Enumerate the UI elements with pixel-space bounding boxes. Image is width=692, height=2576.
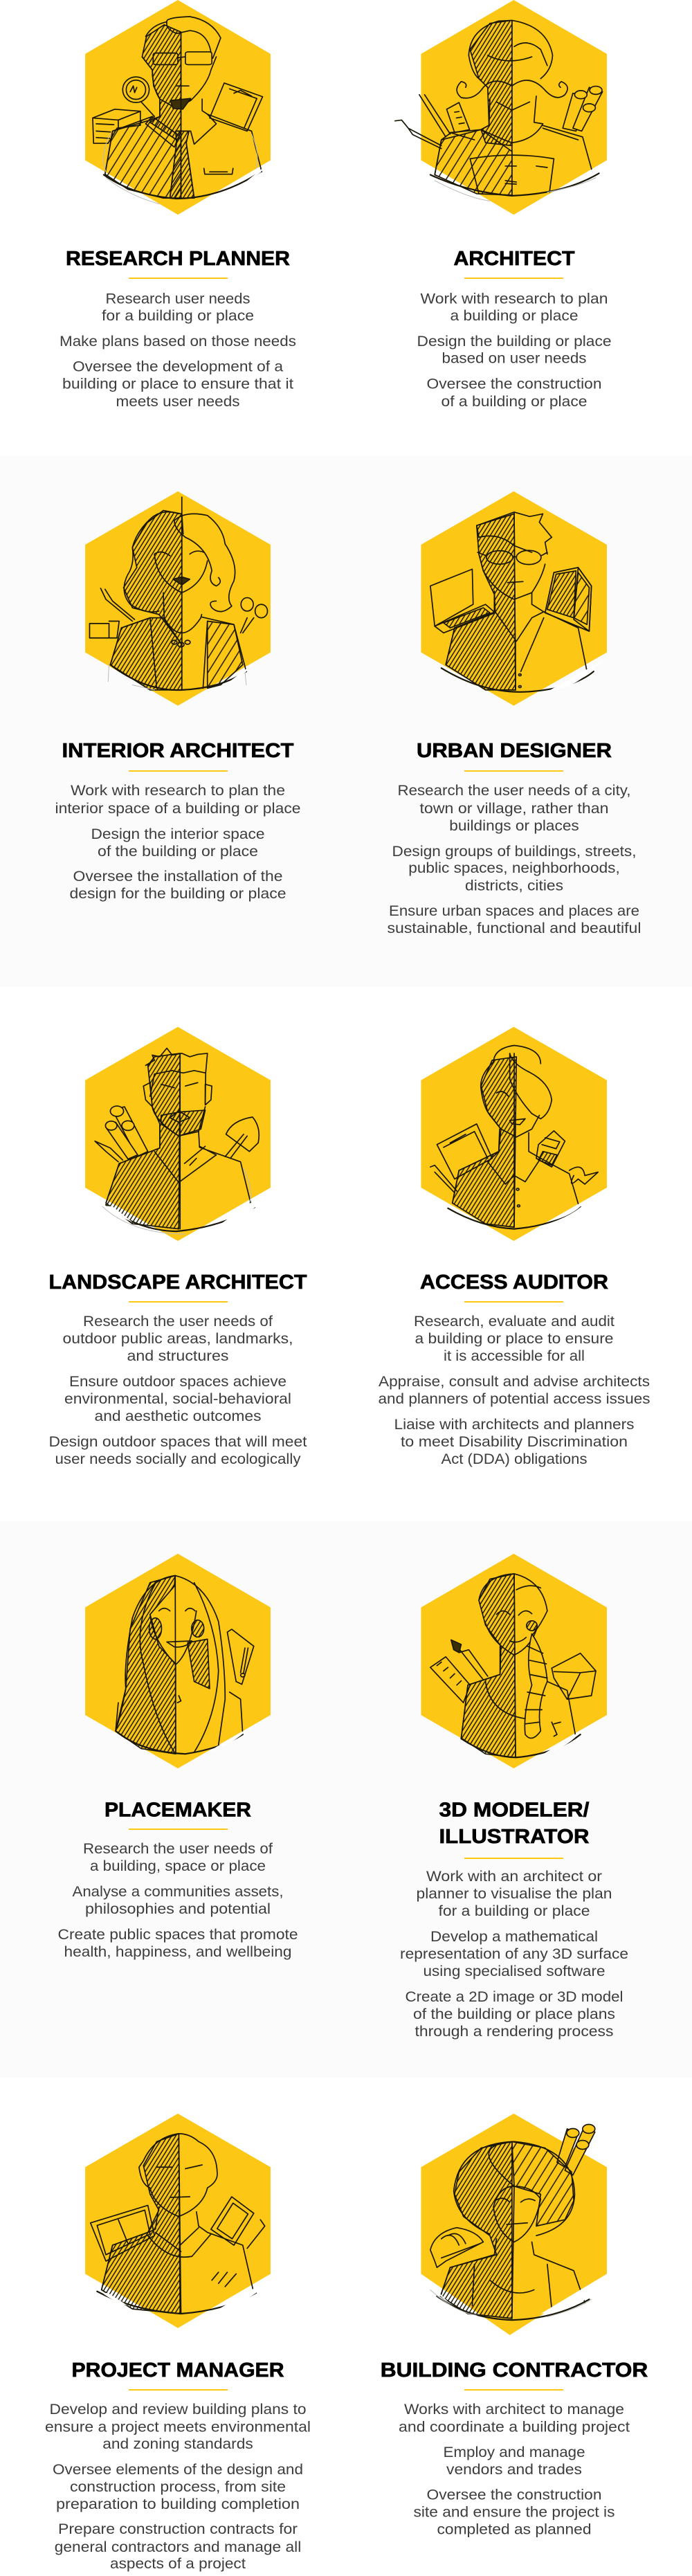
icon: research planner portrait in hexagon xyxy=(85,0,271,215)
text block: placemaker duties: Analyse a communities assets, xyxy=(72,1884,284,1900)
text block: urban designer duties: districts, cities xyxy=(465,878,563,894)
text block: 3D modeler duties: planner to visualise the plan xyxy=(417,1886,612,1902)
text block: building contractor duties: vendors and trades xyxy=(446,2462,582,2478)
text block: project manager duties: Prepare construction contracts for xyxy=(58,2521,298,2537)
panel: placemaker xyxy=(58,1554,298,1960)
heading: 3D modeler / illustrator xyxy=(439,1799,590,1848)
text block: interior architect duties: interior space of a building or place xyxy=(55,801,300,817)
text block: interior architect duties: design for the building or place xyxy=(69,886,286,902)
text block: 3D modeler duties: for a building or place xyxy=(439,1903,590,1919)
text block: 3D modeler duties: through a rendering process xyxy=(415,2024,613,2040)
text block: landscape architect duties: outdoor public areas, landmarks, xyxy=(62,1331,293,1347)
text block: building contractor duties xyxy=(399,2402,630,2537)
heading: interior architect: INTERIOR ARCHITECT xyxy=(62,740,294,762)
text block: access auditor duties: and planners of potential access issues xyxy=(378,1391,650,1407)
panel: access auditor xyxy=(378,1027,650,1467)
icon: 3D modeler portrait in hexagon xyxy=(421,1554,607,1768)
text block: landscape architect duties: Design outdoor spaces that will meet xyxy=(48,1434,307,1450)
heading: building contractor: BUILDING CONTRACTOR xyxy=(381,2359,648,2382)
panel: interior architect xyxy=(55,491,300,902)
text block: project manager duties: aspects of a project xyxy=(110,2556,246,2572)
divider xyxy=(129,2389,228,2391)
text block: landscape architect duties: and aesthetic outcomes xyxy=(94,1408,262,1424)
text block: project manager duties: Oversee elements of the design and xyxy=(53,2462,303,2478)
text block: 3D modeler duties: Work with an architect or xyxy=(426,1869,602,1885)
icon: access auditor portrait in hexagon xyxy=(421,1027,607,1241)
text block: research planner duties: meets user needs xyxy=(116,394,239,410)
text block: architect duties: Oversee the construction xyxy=(426,377,602,392)
panel: project manager xyxy=(45,2114,311,2572)
text block: urban designer duties: Design groups of buildings, streets, xyxy=(392,844,637,860)
text block: access auditor duties: a building or place to ensure xyxy=(415,1331,613,1347)
text block: landscape architect duties: Research the user needs of xyxy=(83,1314,273,1330)
icon: landscape architect portrait in hexagon xyxy=(85,1027,271,1241)
text block: interior architect duties: Oversee the installation of the xyxy=(73,869,282,885)
text block: 3D modeler duties: using specialised software xyxy=(424,1963,605,1979)
text block: placemaker duties: philosophies and potential xyxy=(85,1901,271,1917)
text block: research planner duties: Make plans based on those needs xyxy=(60,334,296,350)
text block: 3D modeler duties: Develop a mathematical xyxy=(430,1929,598,1945)
text block: architect duties xyxy=(417,291,612,410)
divider xyxy=(129,770,228,772)
text block: research planner duties: Oversee the development of a xyxy=(73,359,283,375)
divider xyxy=(464,1858,563,1859)
text block: placemaker duties xyxy=(58,1841,298,1960)
text block: building contractor duties: Oversee the construction xyxy=(426,2487,602,2503)
icon: project manager portrait in hexagon xyxy=(85,2114,271,2328)
panel background: grey band behind row four xyxy=(0,1521,692,2078)
text block: landscape architect duties: Ensure outdoor spaces achieve xyxy=(69,1374,286,1390)
text block: research planner duties: Research user needs xyxy=(105,291,251,307)
text block: placemaker duties: health, happiness, and wellbeing xyxy=(64,1944,292,1960)
text block: interior architect duties: of the building or place xyxy=(98,844,258,860)
text block: placemaker duties: Research the user needs of xyxy=(83,1841,273,1857)
heading: landscape architect: LANDSCAPE ARCHITECT xyxy=(48,1271,307,1294)
text block: access auditor duties: Research, evaluate and audit xyxy=(414,1314,614,1330)
text block: project manager duties: and zoning standards xyxy=(102,2436,253,2452)
divider xyxy=(464,1301,563,1303)
text block: building contractor duties: completed as planned xyxy=(437,2522,591,2537)
text block: architect duties: of a building or place xyxy=(441,394,587,410)
panel: building contractor xyxy=(381,2114,648,2537)
text block: project manager duties xyxy=(45,2402,311,2572)
icon: building contractor portrait in hexagon xyxy=(421,2114,607,2335)
text block: interior architect duties xyxy=(55,783,300,902)
divider xyxy=(464,278,563,279)
text block: architect duties: Work with research to plan xyxy=(421,291,608,307)
text block: access auditor duties: Act (DDA) obligations xyxy=(441,1451,587,1467)
text block: building contractor duties: Employ and manage xyxy=(443,2445,585,2460)
text block: interior architect duties: Work with research to plan the xyxy=(71,783,285,799)
text block: research planner duties: building or place to ensure that it xyxy=(62,377,293,392)
text block: access auditor duties xyxy=(378,1314,650,1467)
text block: placemaker duties: a building, space or place xyxy=(90,1858,266,1874)
text block: 3D modeler duties: of the building or place plans xyxy=(413,2006,615,2022)
text block: urban designer duties: Research the user needs of a city, xyxy=(397,783,631,799)
divider xyxy=(464,2389,563,2391)
text block: landscape architect duties: user needs socially and ecologically xyxy=(55,1451,301,1467)
text block: project manager duties: construction process, from site xyxy=(70,2479,286,2495)
heading: urban designer: URBAN DESIGNER xyxy=(417,740,612,762)
text block: 3D modeler duties xyxy=(400,1869,628,2040)
text block: landscape architect duties: environmental, social-behavioral xyxy=(64,1391,291,1407)
text block: placemaker duties: Create public spaces that promote xyxy=(58,1927,298,1943)
text block: access auditor duties: it is accessible for all xyxy=(444,1348,585,1364)
text block: urban designer duties: public spaces, neighborhoods, xyxy=(408,860,620,876)
text block: urban designer duties: buildings or places xyxy=(449,818,579,834)
text block: architect duties: a building or place xyxy=(450,308,579,324)
text block: project manager duties: Develop and review building plans to xyxy=(50,2402,306,2418)
text block: access auditor duties: to meet Disability Discrimination xyxy=(401,1434,628,1450)
divider xyxy=(129,1829,228,1830)
text block: architect duties: Design the building or place xyxy=(417,334,612,350)
icon: placemaker portrait in hexagon xyxy=(85,1554,271,1768)
text block: project manager duties: ensure a project meets environmental xyxy=(45,2420,311,2435)
text block: urban designer duties xyxy=(388,783,641,936)
text block: urban designer duties: town or village, rather than xyxy=(419,801,609,817)
text block: project manager duties: preparation to building completion xyxy=(56,2496,300,2512)
text block: 3D modeler duties: Create a 2D image or 3D model xyxy=(406,1989,623,2005)
panel: landscape architect xyxy=(48,1027,307,1467)
panel: urban designer xyxy=(388,491,641,936)
panel: 3D modeler / illustrator xyxy=(400,1554,628,2040)
divider xyxy=(464,770,563,772)
heading: 3D modeler / illustrator: 3D MODELER/ xyxy=(439,1799,590,1822)
text block: landscape architect duties xyxy=(48,1314,307,1467)
text block: building contractor duties: site and ensure the project is xyxy=(414,2504,614,2521)
text block: interior architect duties: Design the interior space xyxy=(91,826,264,842)
text block: access auditor duties: Liaise with architects and planners xyxy=(394,1417,634,1433)
heading: 3D modeler / illustrator: ILLUSTRATOR xyxy=(439,1826,590,1848)
text block: 3D modeler duties: representation of any 3D surface xyxy=(400,1946,628,1962)
text block: building contractor duties: Works with architect to manage xyxy=(404,2402,624,2418)
divider xyxy=(129,1301,228,1303)
text block: landscape architect duties: and structures xyxy=(127,1348,228,1364)
heading: access auditor: ACCESS AUDITOR xyxy=(420,1271,608,1294)
icon: interior architect portrait in hexagon xyxy=(85,491,271,706)
text block: access auditor duties: Appraise, consult and advise architects xyxy=(379,1374,650,1390)
heading: project manager: PROJECT MANAGER xyxy=(72,2359,284,2382)
heading: placemaker: PLACEMAKER xyxy=(104,1799,251,1822)
text block: building contractor duties: and coordinate a building project xyxy=(399,2420,630,2435)
text block: urban designer duties: sustainable, functional and beautiful xyxy=(388,920,641,936)
text block: research planner duties: for a building or place xyxy=(102,308,254,324)
divider xyxy=(129,278,228,279)
text block: research planner duties xyxy=(60,291,296,410)
icon: urban designer portrait in hexagon xyxy=(421,491,607,706)
text block: urban designer duties: Ensure urban spaces and places are xyxy=(389,903,639,919)
panel: research planner xyxy=(60,0,296,410)
heading: architect: ARCHITECT xyxy=(454,248,575,270)
text block: architect duties: based on user needs xyxy=(441,351,587,367)
panel: architect xyxy=(395,0,612,410)
heading: research planner: RESEARCH PLANNER xyxy=(66,248,290,270)
icon: architect portrait in hexagon xyxy=(395,0,607,215)
text block: project manager duties: general contractors and manage all xyxy=(55,2539,301,2555)
panel background: grey band behind row two xyxy=(0,456,692,987)
